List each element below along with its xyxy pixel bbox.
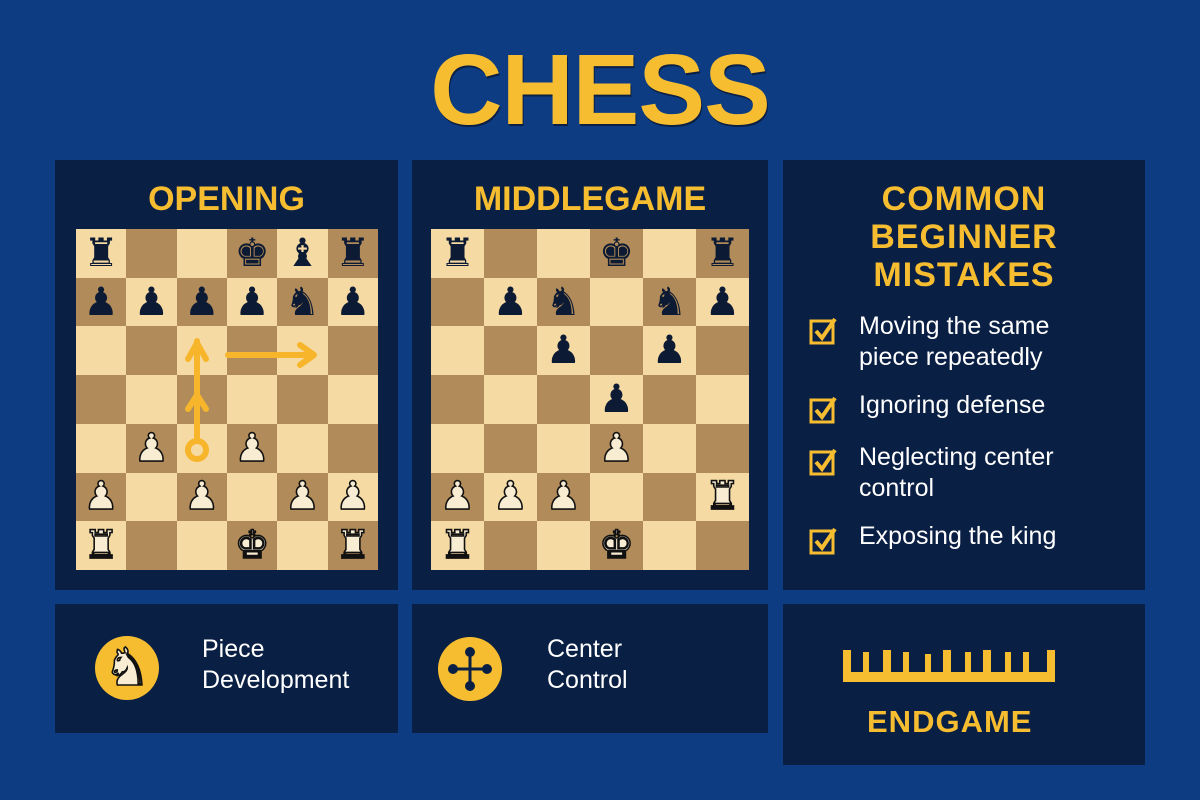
chess board: middlegame: ♜ [440, 523, 475, 568]
label: center control: Control [547, 666, 628, 694]
chess board: middlegame: ♞ [652, 280, 687, 325]
heading: common beginner mistakes [870, 180, 1058, 294]
icon: knight [95, 636, 159, 700]
label: piece development: Development [202, 666, 349, 694]
label: center control: Center [547, 635, 622, 663]
chess board: opening: ♜ [84, 231, 119, 276]
icon: center cross [438, 637, 502, 701]
title: CHESS [430, 34, 770, 146]
chess board: opening: ♟ [184, 474, 219, 519]
chess board: middlegame: ♟ [599, 377, 634, 422]
chess board: middlegame: ♟ [493, 474, 528, 519]
mistake 2: Ignoring defense [859, 391, 1045, 419]
chess board: middlegame: ♚ [599, 523, 634, 568]
mistake 3: Neglecting center [859, 443, 1054, 471]
chess board: middlegame: ♟ [440, 474, 475, 519]
chess board: opening: ♜ [335, 523, 370, 568]
mistake 4: Exposing the king [859, 522, 1056, 550]
chess board: opening: ♚ [235, 523, 270, 568]
chess board: opening: ♝ [285, 231, 320, 276]
chess board: middlegame: ♟ [599, 426, 634, 471]
panel: middlegame [412, 160, 768, 590]
mistake 4 [810, 522, 1056, 554]
chess board: opening: ♜ [84, 523, 119, 568]
mistake 1 [810, 312, 1049, 371]
chess board: opening: ♟ [134, 280, 169, 325]
mistake 3: control [859, 474, 934, 502]
mistake 1: Moving the same [859, 312, 1049, 340]
mistake 2 [810, 391, 1045, 424]
heading: common beginner mistakes: COMMON [882, 180, 1046, 218]
icon: endgame bar [843, 650, 1055, 682]
panel: common beginner mistakes [783, 160, 1145, 590]
chess board: middlegame: ♟ [546, 328, 581, 373]
heading: common beginner mistakes: BEGINNER [870, 218, 1058, 256]
chess board: middlegame: ♟ [705, 280, 740, 325]
chess board: opening: ♟ [84, 474, 119, 519]
chess board: opening: ♚ [235, 231, 270, 276]
chess board: opening [76, 229, 378, 570]
panel: endgame [783, 604, 1145, 765]
chess board: opening: ♟ [335, 474, 370, 519]
label: piece development [202, 635, 350, 694]
chess board: middlegame [431, 229, 749, 570]
label: piece development: Piece [202, 635, 265, 663]
heading: common beginner mistakes: MISTAKES [873, 256, 1055, 294]
chess board: middlegame: ♜ [440, 231, 475, 276]
chess board: middlegame: ♟ [493, 280, 528, 325]
chess board: opening: ♟ [335, 280, 370, 325]
chess board: opening: ♟ [184, 280, 219, 325]
chess board: middlegame: ♞ [546, 280, 581, 325]
chess board: opening: ♞ [285, 280, 320, 325]
chess board: middlegame: ♟ [652, 328, 687, 373]
arrows: pawn moves [185, 338, 317, 462]
chess board: middlegame: ♟ [546, 474, 581, 519]
mistake 1: piece repeatedly [859, 343, 1042, 371]
panel: opening [55, 160, 398, 590]
heading: opening: OPENING [148, 180, 305, 218]
chess board: opening: ♟ [235, 426, 270, 471]
chess board: opening: ♟ [134, 426, 169, 471]
heading: endgame: ENDGAME [867, 704, 1032, 739]
icon: knight: ♞ [104, 638, 150, 698]
panel: center control [412, 604, 768, 733]
chess board: middlegame: ♜ [705, 474, 740, 519]
chess board: opening: ♟ [84, 280, 119, 325]
chess board: middlegame: ♚ [599, 231, 634, 276]
chess board: opening: ♟ [285, 474, 320, 519]
label: center control [547, 635, 628, 694]
chess board: middlegame: ♜ [705, 231, 740, 276]
heading: middlegame: MIDDLEGAME [474, 180, 706, 218]
chess board: opening: ♟ [235, 280, 270, 325]
mistake 3 [810, 443, 1054, 502]
panel: piece development [55, 604, 398, 733]
chess board: opening: ♜ [335, 231, 370, 276]
